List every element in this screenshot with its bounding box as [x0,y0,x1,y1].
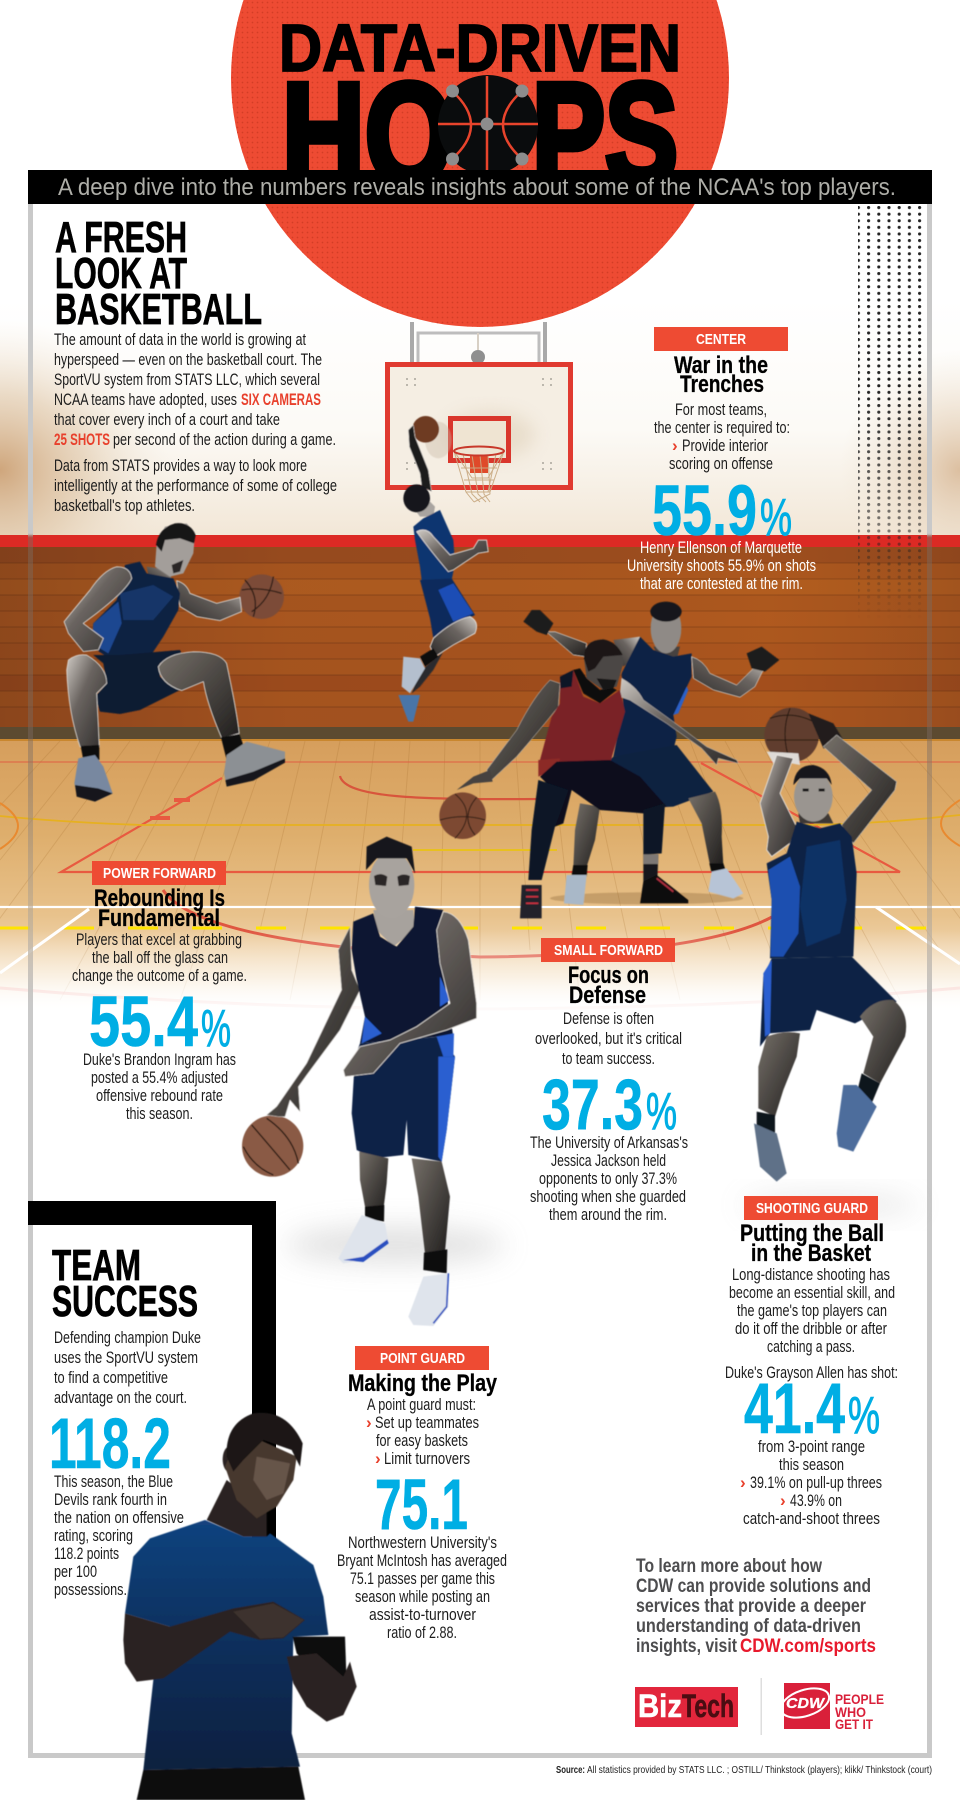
description: to find a competitive [54,1368,168,1387]
description: For most teams, [675,400,767,419]
orange title circle [231,0,729,327]
badge [355,1346,489,1370]
description: change the outcome of a game. [72,966,247,985]
stat caption: season while posting an [355,1587,490,1606]
description: Defense is often [563,1009,654,1028]
statistic 55.4%: % [201,1000,231,1058]
source credit: Source: [556,1765,585,1776]
description [366,1395,479,1468]
description [725,1265,898,1382]
call to action [636,1556,876,1657]
panel: small forward [530,938,688,1224]
stat caption: 39.1% on pull-up threes [750,1473,882,1492]
heading: Rebounding Is [94,885,225,912]
stat caption: Bryant McIntosh has averaged [337,1551,507,1570]
stat caption: Duke's Brandon Ingram has [83,1050,236,1069]
logo: CDW people who get it: CDW [786,1695,826,1712]
stat caption: This season, the Blue [54,1472,173,1491]
description: Defending champion Duke [54,1328,201,1347]
intro paragraph: intelligently at the performance of some of college [54,476,337,495]
stat caption: this season [779,1455,844,1474]
heading [568,962,649,1009]
statistic 37.3%: % [646,1083,677,1141]
stat caption: catch-and-shoot threes [743,1509,880,1528]
statistic 41.4%: % [848,1387,880,1445]
intro: a fresh look at basketball [54,213,337,515]
basketball backboard and hoop [388,322,570,502]
badge [541,938,675,962]
heading: Trenches [680,371,764,398]
stat caption: possessions. [54,1580,127,1599]
heading: Making the Play [348,1370,498,1397]
figure: man with tablet [123,1413,357,1800]
badge: CENTER [696,332,746,348]
statistic 75.1: 75.1 [375,1466,468,1545]
stat caption: › [780,1491,786,1510]
heading: in the Basket [751,1240,871,1267]
stat caption: offensive rebound rate [96,1086,223,1105]
stat caption: ratio of 2.88. [387,1623,457,1642]
logo: CDW people who get it: GET IT [835,1717,874,1732]
statistic 55.9%: 55.9 [652,472,757,551]
stat caption: assist-to-turnover [369,1605,476,1624]
stat caption: Jessica Jackson held [551,1151,666,1170]
heading [55,213,262,334]
panel: team success [28,1201,276,1599]
heading [740,1220,884,1267]
heading: Focus on [568,962,649,989]
logo: BizTech [635,1687,738,1727]
description: › [375,1449,381,1468]
stat caption: posted a 55.4% adjusted [91,1068,228,1087]
description: Players that excel at grabbing [76,930,242,949]
description [54,1328,201,1407]
heading: LOOK AT [55,249,187,298]
stat caption [530,1133,688,1224]
description: Long-distance shooting has [732,1265,890,1284]
heading: Putting the Ball [740,1220,884,1247]
statistic 55.9%: % [760,489,792,547]
description: advantage on the court. [54,1388,187,1407]
intro paragraph: hyperspeed — even on the basketball court. The [54,350,322,369]
description: overlooked, but it's critical [535,1029,682,1048]
description: for easy baskets [376,1431,468,1450]
stat caption: them around the rim. [549,1205,667,1224]
statistic 41.4%: 41.4 [744,1370,845,1449]
badge [654,327,788,351]
description [535,1009,682,1068]
stat caption: per 100 [54,1562,97,1581]
stat caption: › [740,1473,746,1492]
heading: Defense [569,982,646,1009]
description [72,930,247,985]
point guard floor shadow [285,1227,505,1263]
basketball [439,792,486,839]
description: › [672,436,678,455]
description: the center is required to: [654,418,790,437]
intro paragraph: SportVU system from STATS LLC, which several [54,370,320,389]
heading: A FRESH [55,213,187,262]
description: scoring on offense [669,454,773,473]
subtitle band: A deep dive into the numbers reveals insights about some of the NCAA's top players. [58,174,896,201]
heading [94,885,225,932]
intro paragraph: that cover every inch of a court and take [54,410,280,429]
call to action: insights, visit [636,1636,738,1657]
description: Provide interior [682,436,768,455]
description: uses the SportVU system [54,1348,198,1367]
logo: CDW people who get it: WHO [835,1705,866,1720]
intro paragraph: NCAA teams have adopted, uses [54,390,237,409]
players: blue defender and red dribbler [439,602,779,918]
divider between logos [760,1678,762,1735]
player: dribbling point guard [242,837,477,1326]
stat caption: 118.2 points [54,1544,119,1563]
badge: SMALL FORWARD [554,943,663,959]
stat caption: Henry Ellenson of Marquette [640,538,802,557]
court background photo [0,300,960,1020]
stat caption: the nation on offensive [54,1508,184,1527]
stat caption: from 3-point range [758,1437,865,1456]
stat caption: opponents to only 37.3% [539,1169,677,1188]
call to action: services that provide a deeper [636,1596,867,1617]
player: dribbling power forward on wall [64,523,285,802]
description: Limit turnovers [384,1449,470,1468]
stat caption: Devils rank fourth in [54,1490,167,1509]
intro paragraph: SIX CAMERAS [241,390,321,409]
front player in red [457,639,738,918]
description: › [366,1413,372,1432]
stat caption: The University of Arkansas's [530,1133,688,1152]
title: data-driven hoops: HO [282,53,454,215]
description: Set up teammates [375,1413,479,1432]
title: data-driven hoops: DATA-DRIVEN [279,11,681,86]
heading: SUCCESS [52,1277,198,1326]
heading: Fundamental [98,905,220,932]
intro paragraph: per second of the action during a game. [113,430,336,449]
title: data-driven hoops [279,11,681,215]
intro paragraph: The amount of data in the world is growing at [54,330,306,349]
intro paragraph: basketball's top athletes. [54,496,195,515]
call to action: understanding of data-driven [636,1616,861,1637]
stat caption: that are contested at the rim. [640,574,803,593]
back player in navy [523,602,779,905]
heading [674,352,768,398]
description: Duke's Grayson Allen has shot: [725,1363,898,1382]
statistic 37.3%: 37.3 [542,1066,643,1145]
player: dunking guard [398,416,488,722]
stat caption: Northwestern University's [348,1533,497,1552]
stat caption [337,1533,507,1642]
badge: POWER FORWARD [103,866,216,882]
panel: shooting guard [725,1196,898,1528]
stat caption [83,1050,236,1123]
black corner bracket [28,1201,276,1545]
icon: basketball in title [438,75,538,175]
heading [52,1241,198,1326]
stat caption: University shoots 55.9% on shots [627,556,816,575]
call to action: CDW can provide solutions and [636,1576,871,1597]
badge [92,861,226,885]
badge [744,1196,878,1220]
description: the ball off the glass can [92,948,228,967]
player: jump-shooting shooting guard [754,708,906,1182]
description: become an essential skill, and [729,1283,895,1302]
dotted column decoration [858,204,924,620]
badge: SHOOTING GUARD [756,1201,868,1217]
stat caption: 43.9% on [790,1491,842,1510]
description: to team success. [562,1049,655,1068]
shadow beneath shooting guard [740,1195,920,1215]
statistic 118.2: 118.2 [49,1405,171,1484]
call to action: To learn more about how [636,1556,822,1577]
statistic 55.4%: 55.4 [89,983,198,1062]
description: do it off the dribble or after [735,1319,887,1338]
intro paragraph [54,330,337,515]
stat caption [627,538,816,593]
logo: BizTech: Biz [638,1688,682,1724]
heading: TEAM [52,1241,141,1290]
badge: POINT GUARD [380,1351,465,1367]
description: catching a pass. [767,1337,855,1356]
intro paragraph: 25 SHOTS [54,430,110,449]
intro paragraph: Data from STATS provides a way to look more [54,456,307,475]
stat caption [740,1437,882,1528]
stat caption: this season. [126,1104,193,1123]
panel: center [627,327,816,593]
heading: War in the [674,352,768,379]
stat caption: rating, scoring [54,1526,133,1545]
description: the game's top players can [737,1301,887,1320]
stat caption [54,1472,184,1599]
panel: point guard [337,1346,507,1642]
logo: CDW people who get it [777,1683,884,1732]
stat caption: shooting when she guarded [530,1187,686,1206]
description: A point guard must: [367,1395,476,1414]
stat caption: 75.1 passes per game this [350,1569,495,1588]
call to action: CDW.com/sports [740,1636,876,1657]
logo: BizTech: Tech [682,1688,734,1724]
description [654,400,790,473]
logo: CDW people who get it: PEOPLE [835,1692,884,1707]
heading: BASKETBALL [55,285,262,334]
panel: power forward [72,861,247,1123]
title: data-driven hoops: PS [532,53,678,215]
